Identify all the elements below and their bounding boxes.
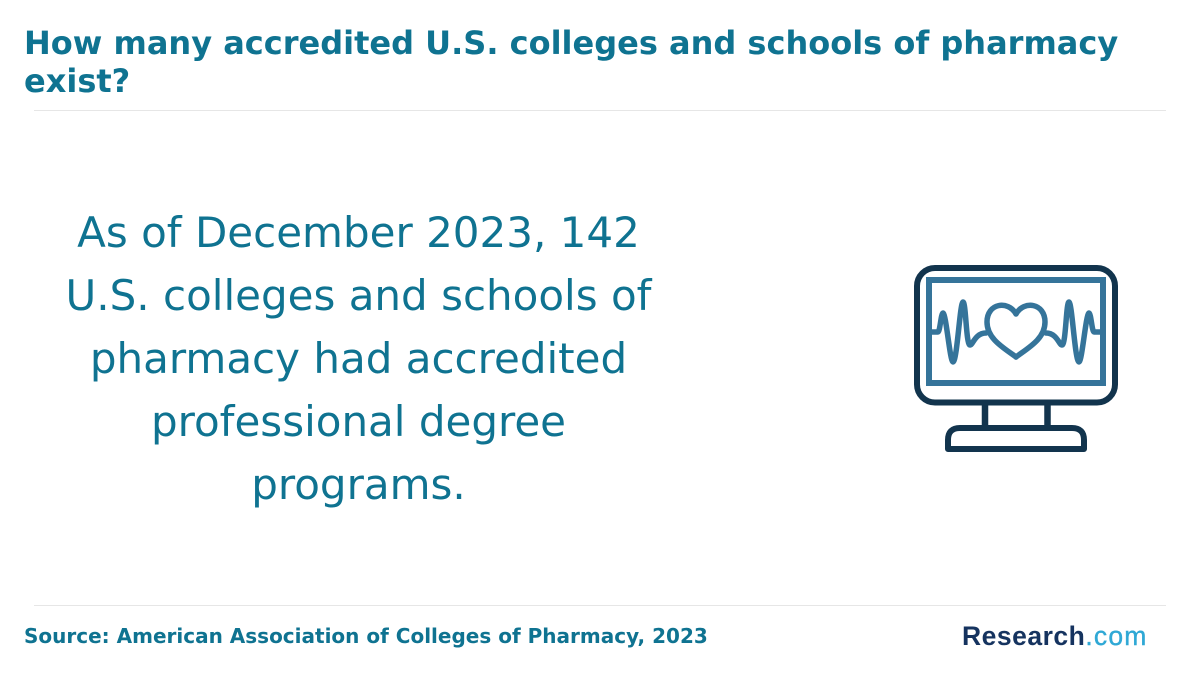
logo: Research.com: Research.com	[962, 621, 1148, 651]
main statement text: pharmacy had accredited	[90, 334, 627, 383]
main statement text: U.S. colleges and schools of	[66, 271, 651, 320]
main statement text: As of December 2023, 142	[77, 208, 640, 257]
main statement text	[66, 208, 652, 509]
title: How many accredited U.S. colleges and schools of pharmacy exist?	[24, 24, 1118, 100]
source line: Source: American Association of Colleges of Pharmacy, 2023	[24, 624, 708, 648]
main statement text: programs.	[251, 460, 466, 509]
main statement text: professional degree	[151, 397, 566, 446]
